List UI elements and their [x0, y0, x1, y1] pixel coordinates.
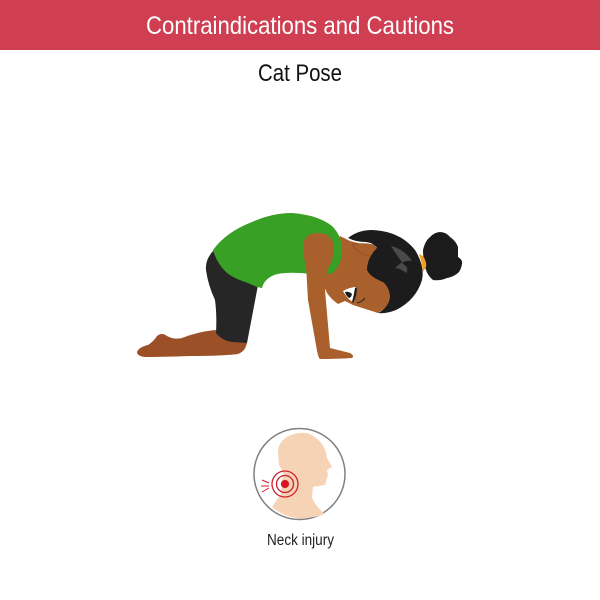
header banner	[0, 0, 600, 50]
hair band	[419, 254, 426, 272]
figure: woman in cat pose	[137, 213, 462, 359]
label: Neck injury: Neck injury	[267, 532, 334, 549]
mouth	[357, 298, 365, 303]
pain rays	[261, 480, 269, 492]
pain target rings	[272, 471, 298, 497]
hair highlight	[391, 246, 412, 273]
subtitle: Cat Pose: Cat Pose	[258, 60, 342, 87]
head silhouette	[272, 433, 332, 518]
iris and lash	[345, 287, 357, 303]
eye	[343, 287, 357, 302]
icon circle	[254, 428, 345, 520]
hair bun	[423, 232, 462, 280]
icon: neck injury	[254, 428, 345, 520]
title: Contraindications and Cautions	[146, 12, 454, 40]
arm and hand	[303, 233, 353, 359]
ear	[352, 244, 376, 256]
neck and face	[322, 236, 392, 313]
hair	[348, 230, 423, 313]
lower leg and foot	[137, 330, 247, 357]
shorts	[206, 251, 258, 343]
shirt	[213, 213, 342, 288]
